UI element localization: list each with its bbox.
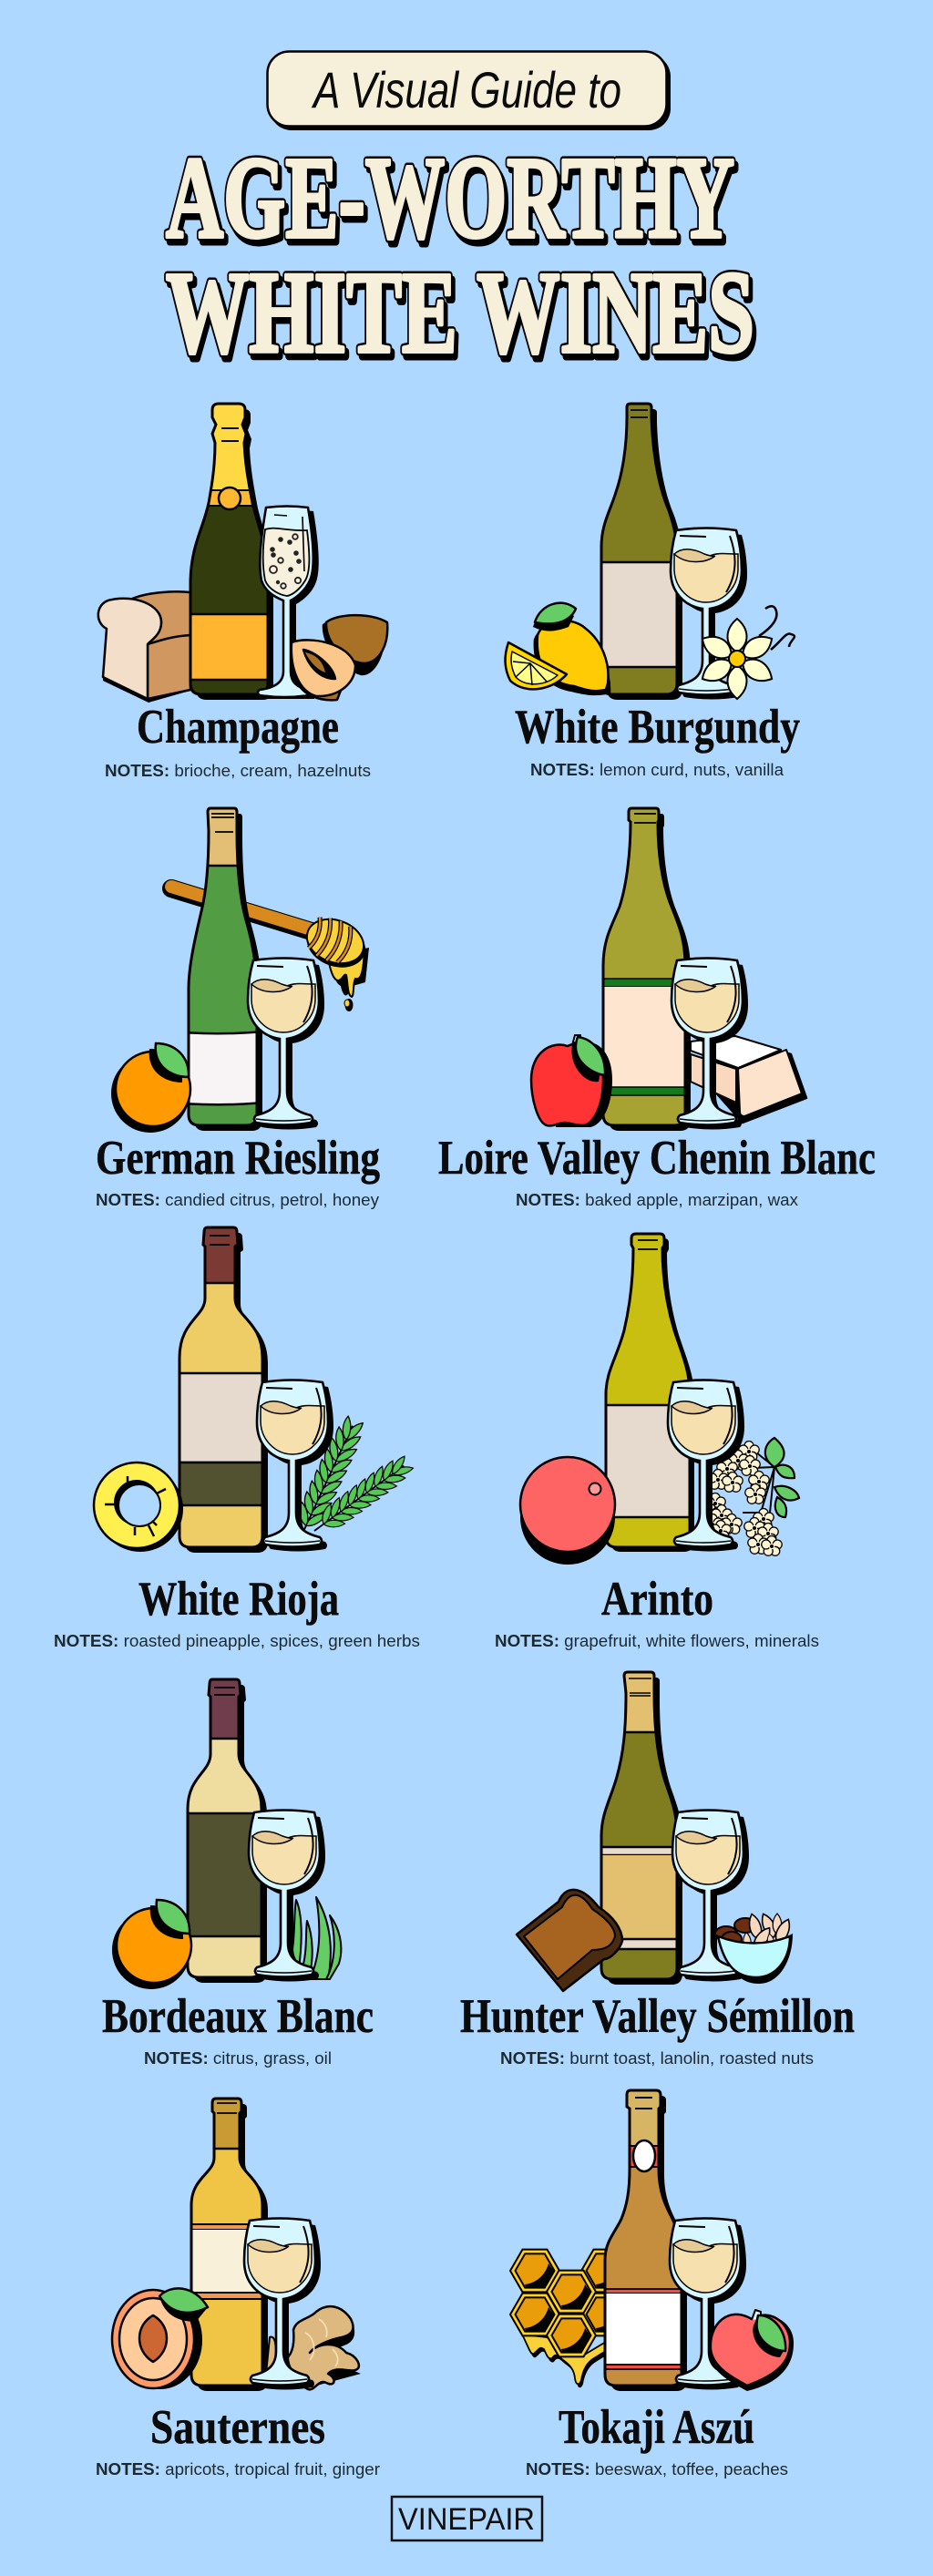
notes: German Riesling: NOTES: candied citrus, petrol, honey bbox=[96, 1191, 379, 1209]
icon: rosemary sprigs bbox=[285, 1411, 418, 1545]
name: Bordeaux Blanc: Bordeaux Blanc bbox=[102, 1990, 374, 2043]
name: Sauternes: Sauternes bbox=[150, 2401, 325, 2454]
panel: Champagne bbox=[98, 401, 387, 780]
icon: peach bbox=[709, 2310, 794, 2391]
icon: arinto bottle bbox=[605, 1232, 694, 1552]
icon: bordeaux bottle bbox=[186, 1678, 267, 1983]
panel: White Rioja bbox=[54, 1221, 420, 1650]
icon: orange bbox=[112, 1900, 191, 1989]
icon: vanilla flower bbox=[698, 606, 795, 699]
notes: Arinto: NOTES: grapefruit, white flowers, minerals bbox=[495, 1632, 819, 1650]
panel: German Riesling bbox=[96, 802, 380, 1209]
notes: Bordeaux Blanc: NOTES: citrus, grass, oil bbox=[144, 2049, 332, 2068]
icon: champagne flute bbox=[258, 507, 319, 699]
name: Tokaji Aszú: Tokaji Aszú bbox=[559, 2401, 754, 2454]
icon: semillon bottle bbox=[600, 1671, 682, 1985]
notes: White Rioja: NOTES: roasted pineapple, spices, green herbs bbox=[54, 1632, 420, 1650]
icon: burnt toast bbox=[517, 1890, 622, 1991]
icon: riesling bottle bbox=[188, 807, 262, 1131]
icon: wine glass bbox=[670, 2218, 746, 2389]
icon: wine glass bbox=[249, 1810, 325, 1981]
subtitle pill: A Visual Guide to: A Visual Guide to bbox=[312, 61, 621, 118]
icon: honey dipper bbox=[171, 887, 373, 1011]
name: German Riesling: German Riesling bbox=[96, 1132, 380, 1185]
icon: bowl of roasted nuts bbox=[715, 1912, 794, 1984]
icon: sauternes bottle bbox=[190, 2098, 268, 2391]
icon: wine glass bbox=[248, 959, 324, 1130]
panel: Arinto bbox=[495, 1234, 819, 1650]
icon: hazelnuts bbox=[292, 615, 387, 700]
notes: Loire Valley Chenin Blanc: NOTES: baked apple, marzipan, wax bbox=[516, 1191, 798, 1209]
panel: Sauternes bbox=[96, 2091, 380, 2479]
logo: VinePair: VINEPAIR bbox=[398, 2502, 535, 2537]
panel: Loire Valley Chenin Blanc bbox=[438, 808, 876, 1209]
subtitle pill: A Visual Guide to bbox=[268, 51, 671, 130]
icon: champagne bottle bbox=[190, 403, 273, 700]
notes: Champagne: NOTES: brioche, cream, hazelnuts bbox=[105, 762, 371, 780]
panel: Hunter Valley Sémillon bbox=[460, 1668, 855, 2068]
icon: ginger root bbox=[266, 2306, 361, 2389]
icon: lemon and slice bbox=[505, 603, 610, 694]
icon: wine glass bbox=[672, 1810, 749, 1981]
notes: Sauternes: NOTES: apricots, tropical fruit, ginger bbox=[96, 2460, 380, 2479]
panel: Tokaji Aszú bbox=[510, 2087, 794, 2479]
icon: bread loaf bbox=[98, 591, 193, 703]
icon: grapefruit bbox=[520, 1457, 615, 1565]
icon: beeswax block bbox=[691, 1036, 806, 1123]
icon: wine glass bbox=[668, 1380, 744, 1551]
icon: wine glass bbox=[671, 529, 747, 700]
name: Champagne: Champagne bbox=[137, 701, 339, 754]
panel: White Burgundy bbox=[505, 404, 800, 779]
name: Arinto: Arinto bbox=[601, 1573, 713, 1626]
icon: white burgundy bottle bbox=[600, 403, 682, 700]
icon: apricot half bbox=[112, 2288, 208, 2389]
icon: pineapple ring bbox=[94, 1462, 183, 1552]
icon: chenin blanc bottle bbox=[601, 807, 691, 1131]
panel: Bordeaux Blanc bbox=[102, 1672, 374, 2068]
icon: honeycomb bbox=[510, 2250, 631, 2387]
icon: wine glass bbox=[244, 2218, 321, 2389]
icon: apple bbox=[531, 1035, 612, 1127]
icon: orange bbox=[111, 1043, 190, 1133]
notes: Hunter Valley Sémillon: NOTES: burnt toast, lanolin, roasted nuts bbox=[500, 2049, 814, 2068]
notes: White Burgundy: NOTES: lemon curd, nuts, vanilla bbox=[530, 761, 784, 779]
icon: rioja bottle bbox=[179, 1226, 268, 1553]
icon: tokaji bottle bbox=[597, 2087, 688, 2391]
icon: wine glass bbox=[672, 959, 748, 1130]
icon: grass bbox=[289, 1897, 341, 1979]
name: White Rioja: White Rioja bbox=[138, 1573, 339, 1626]
name: Hunter Valley Sémillon: Hunter Valley Sémillon bbox=[460, 1990, 855, 2043]
icon: wine glass bbox=[257, 1380, 333, 1551]
notes: Tokaji Aszú: NOTES: beeswax, toffee, peaches bbox=[526, 2460, 788, 2479]
name: White Burgundy: White Burgundy bbox=[515, 701, 800, 754]
title: Age-Worthy White Wines bbox=[166, 133, 754, 377]
icon: white flowers branch bbox=[701, 1438, 799, 1555]
